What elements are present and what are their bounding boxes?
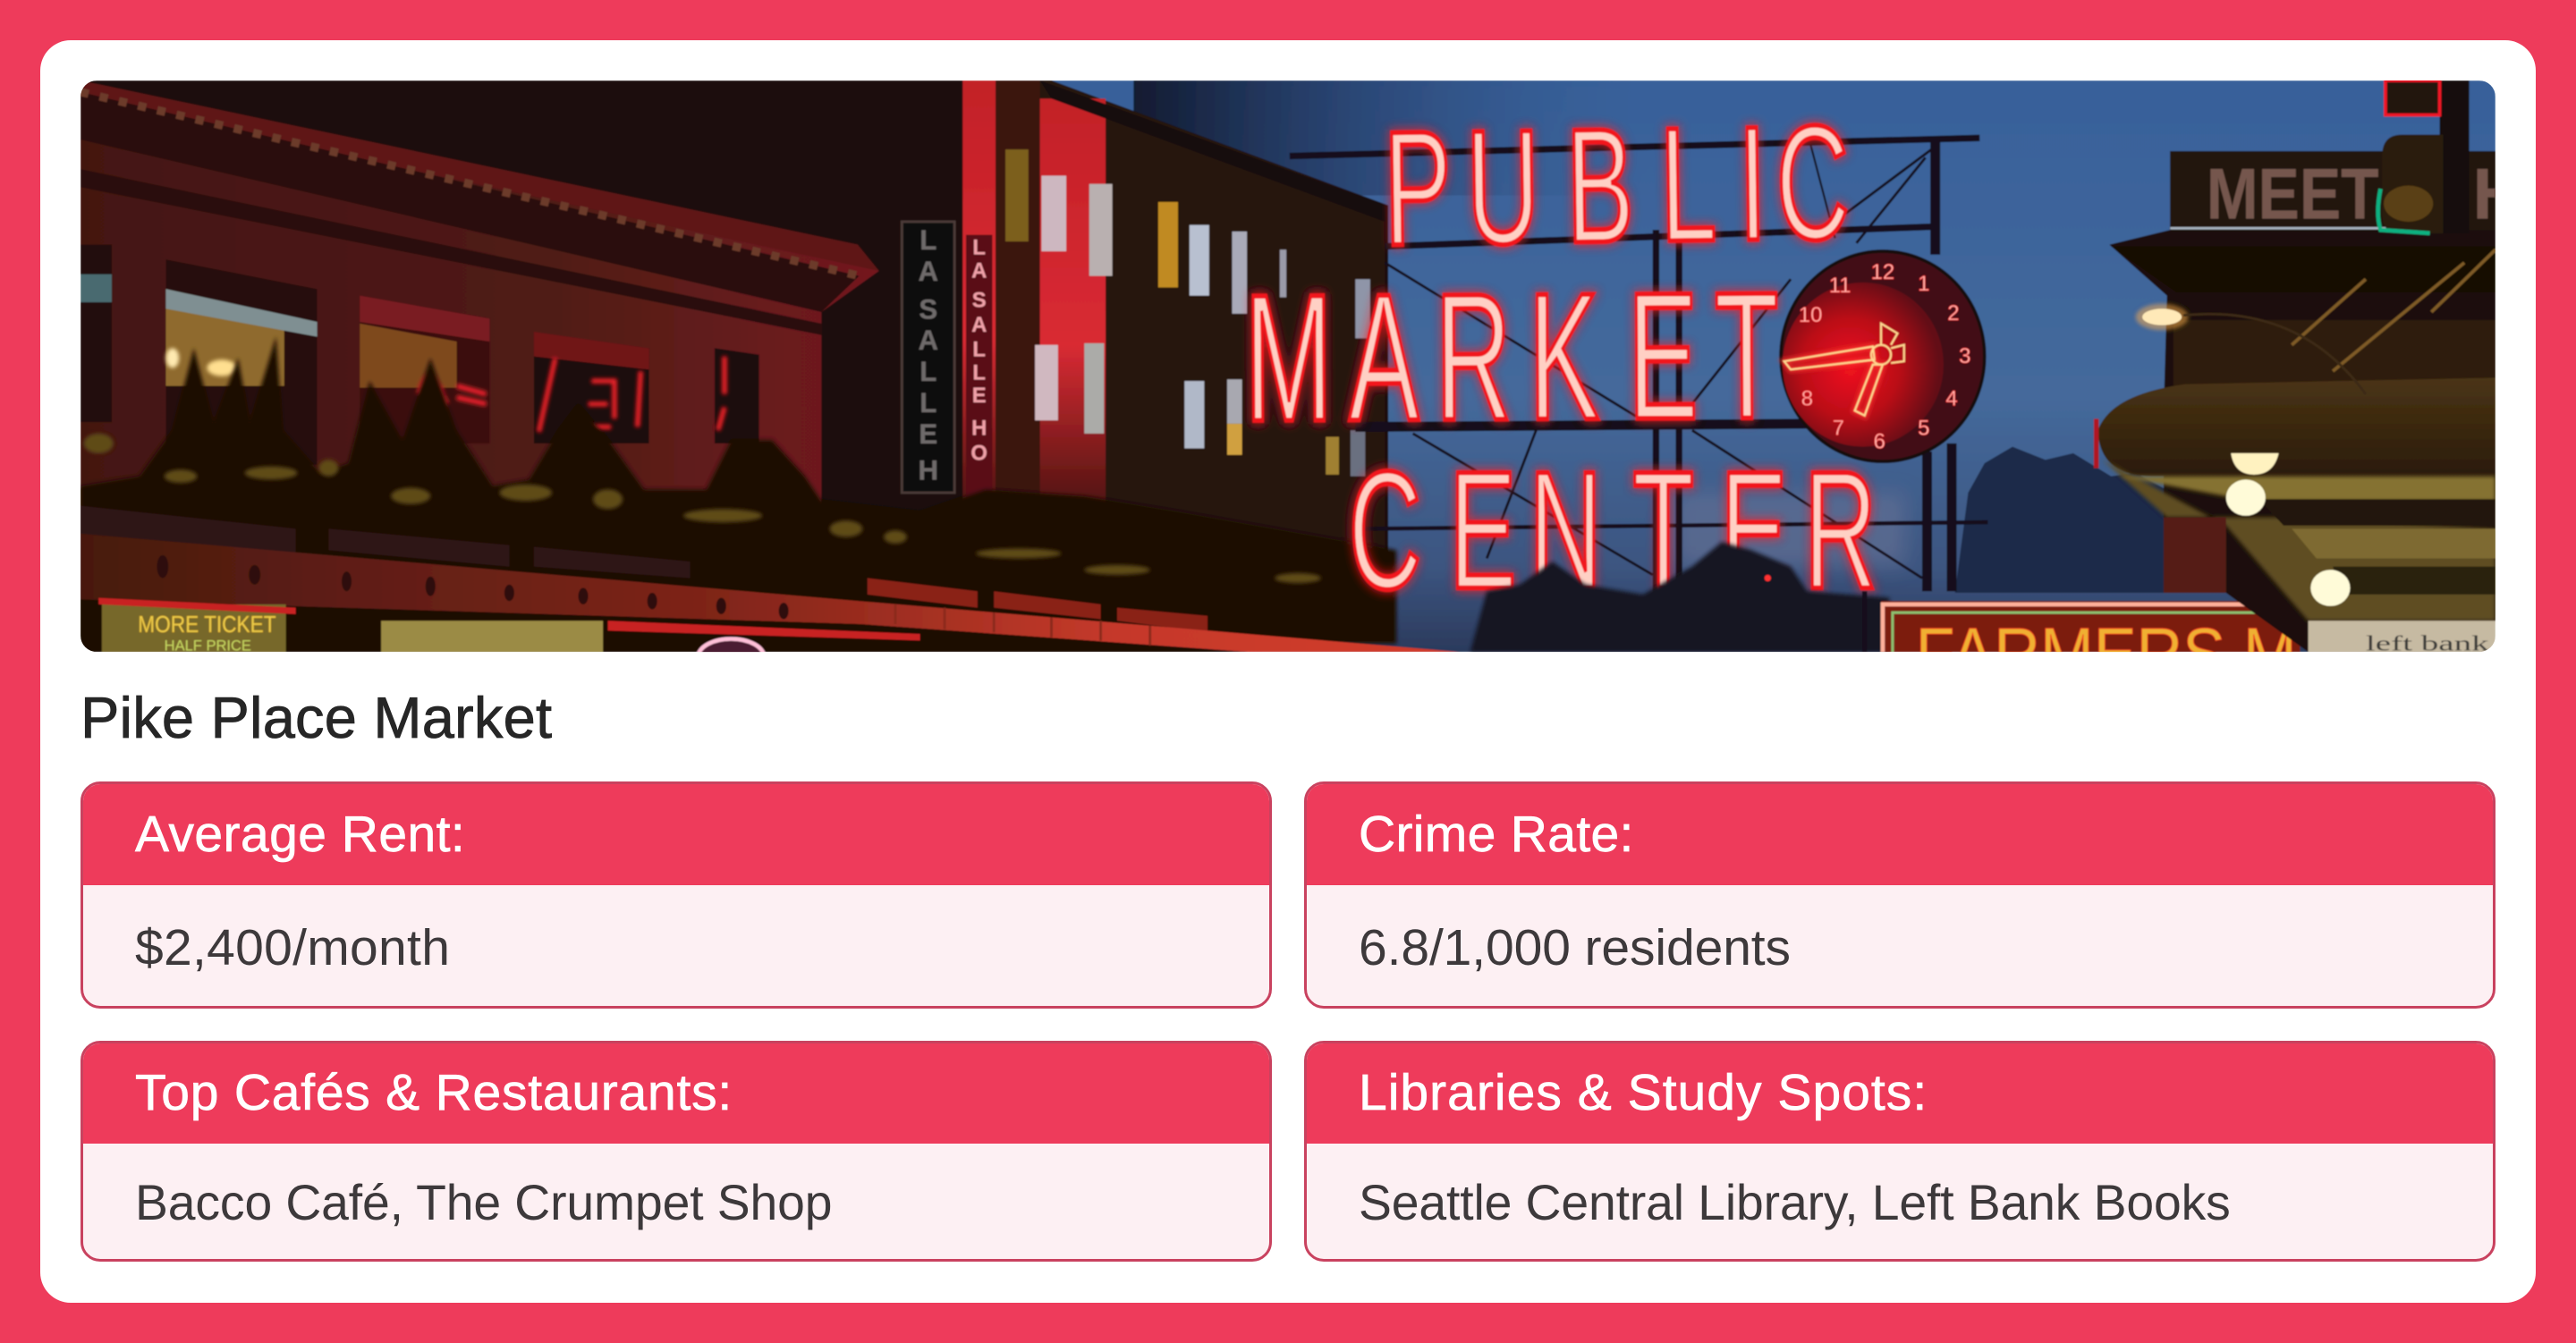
neon sign: PUBLIC MARKET CENTER: MARKET [1244,254,1779,459]
La Salle vertical signs: E [919,418,937,450]
label: cafes and restaurants: Top Cafés & Restaurants: [135,1064,733,1121]
La Salle vertical signs: L [972,360,986,384]
left market building [80,80,879,542]
value: crime rate: 6.8/1,000 residents [1359,919,1791,976]
street lamps [2136,304,2366,606]
right building and canopy: H [2472,154,2525,234]
neon sign: PUBLIC MARKET CENTER: MARKET [1244,254,1779,459]
card header: cafes and restaurants [80,1041,1277,1144]
La Salle vertical signs: L [972,236,986,260]
neon sign: PUBLIC MARKET CENTER: PUBLIC [1383,92,1851,280]
La Salle vertical signs: A [971,258,987,283]
card: crime rate [1304,781,2496,1009]
clock: 10 [1799,303,1822,327]
title: Pike Place Market [80,685,552,750]
clock: 11 [1829,274,1852,298]
clock: 2 [1947,301,1960,325]
clock: 12 [1871,260,1894,284]
clock: 3 [1959,344,1970,368]
neon sign: PUBLIC MARKET CENTER: CENTER [1349,436,1877,624]
foreground trees over sign [1470,542,1889,652]
right building and canopy: MEET [2207,154,2379,234]
upper dark building [80,80,1388,558]
red lit building [962,80,1385,567]
La Salle vertical signs: H [918,454,938,486]
neon sign: PUBLIC MARKET CENTER: CENTER [1349,436,1877,624]
La Salle vertical signs: L [919,224,936,256]
La Salle vertical signs: A [918,325,938,356]
La Salle vertical signs: A [918,256,938,287]
card: cafes and restaurants [80,1041,1272,1262]
clock [1781,251,1985,461]
awning band [80,534,1461,652]
clock: 1 [1918,272,1929,296]
clock: 6 [1874,429,1885,453]
sign frame and struts [1290,131,1987,608]
planters and foliage [80,337,1396,644]
La Salle vertical signs: H [971,417,987,441]
La Salle vertical signs: S [972,288,987,312]
La Salle vertical signs: L [919,356,936,387]
La Salle vertical signs [902,222,992,498]
La Salle vertical signs: L [972,338,986,362]
card: libraries and study spots [1304,1041,2496,1262]
La Salle vertical signs: A [971,313,987,337]
value: libraries and study spots: Seattle Central Library, Left Bank Books [1359,1175,2231,1230]
Farmers Market neon sign: FARMERS M [1916,614,2297,695]
card: average rent [80,781,1272,1009]
sky [80,80,2496,652]
La Salle vertical signs: E [972,384,987,408]
neon sign: PUBLIC MARKET CENTER: PUBLIC [1383,92,1851,280]
La Salle vertical signs: O [970,441,987,465]
clock: 5 [1918,417,1929,441]
label: average rent: Average Rent: [135,806,465,863]
clock: 8 [1801,387,1813,411]
right building and canopy: left bank [2366,632,2489,655]
clock: 7 [1833,417,1844,441]
clock: 4 [1945,387,1958,411]
street level shops [97,597,921,653]
La Salle vertical signs: S [919,293,937,325]
neon sign: PUBLIC MARKET CENTER [1244,92,1877,624]
traffic signal [2378,80,2470,233]
card header: libraries and study spots [1304,1041,2501,1144]
card header: crime rate [1304,781,2501,885]
label: libraries and study spots: Libraries & Study Spots: [1359,1064,1928,1121]
La Salle vertical signs: L [919,387,936,418]
value: average rent: $2,400/month [135,919,450,976]
street level shops: HALF PRICE [165,637,251,654]
street level shops: MORE TICKET [138,612,276,638]
label: crime rate: Crime Rate: [1359,806,1634,863]
card header: average rent [80,781,1277,885]
right building and canopy [2097,151,2525,655]
value: cafes and restaurants: Bacco Café, The Crumpet Shop [135,1175,832,1230]
